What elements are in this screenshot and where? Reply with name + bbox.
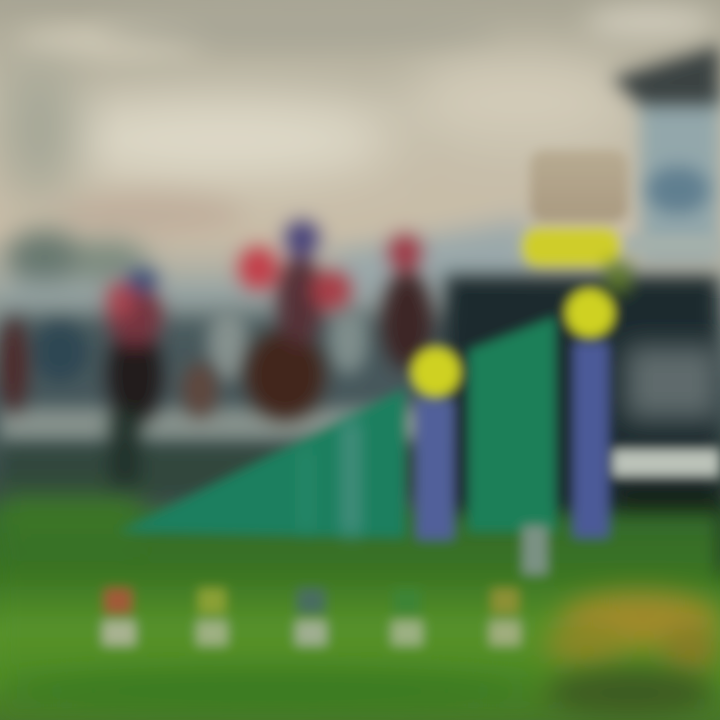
marker: green xyxy=(391,588,423,646)
marker: yellow-green xyxy=(196,588,228,646)
horse group: centre xyxy=(238,220,352,420)
background: yellow flower bed xyxy=(545,592,720,716)
marker: yellow circle two xyxy=(565,288,615,338)
racehorses and jockeys xyxy=(0,220,433,485)
background: grandstand xyxy=(445,45,720,575)
chart: blue bar two with yellow marker xyxy=(565,288,615,538)
horse group: edge left xyxy=(0,317,28,413)
horse group: right xyxy=(381,234,433,370)
background: overcast sky xyxy=(0,0,720,290)
marker: blue xyxy=(295,588,327,646)
chart: pale pole below green area xyxy=(522,525,548,575)
background: grass xyxy=(0,495,720,720)
background: midground rail and track xyxy=(0,306,470,510)
legend: five coloured category markers xyxy=(102,588,521,646)
background: distant trees and stand roofline xyxy=(0,218,530,318)
callout: tan block and yellow band xyxy=(522,150,630,292)
marker: yellow circle one xyxy=(411,347,461,397)
chart: blue bar one with yellow marker xyxy=(411,347,461,540)
horse group: left xyxy=(106,268,218,485)
marker: orange xyxy=(489,588,521,646)
marker: red xyxy=(102,588,136,646)
chart: green rising area xyxy=(118,316,556,538)
